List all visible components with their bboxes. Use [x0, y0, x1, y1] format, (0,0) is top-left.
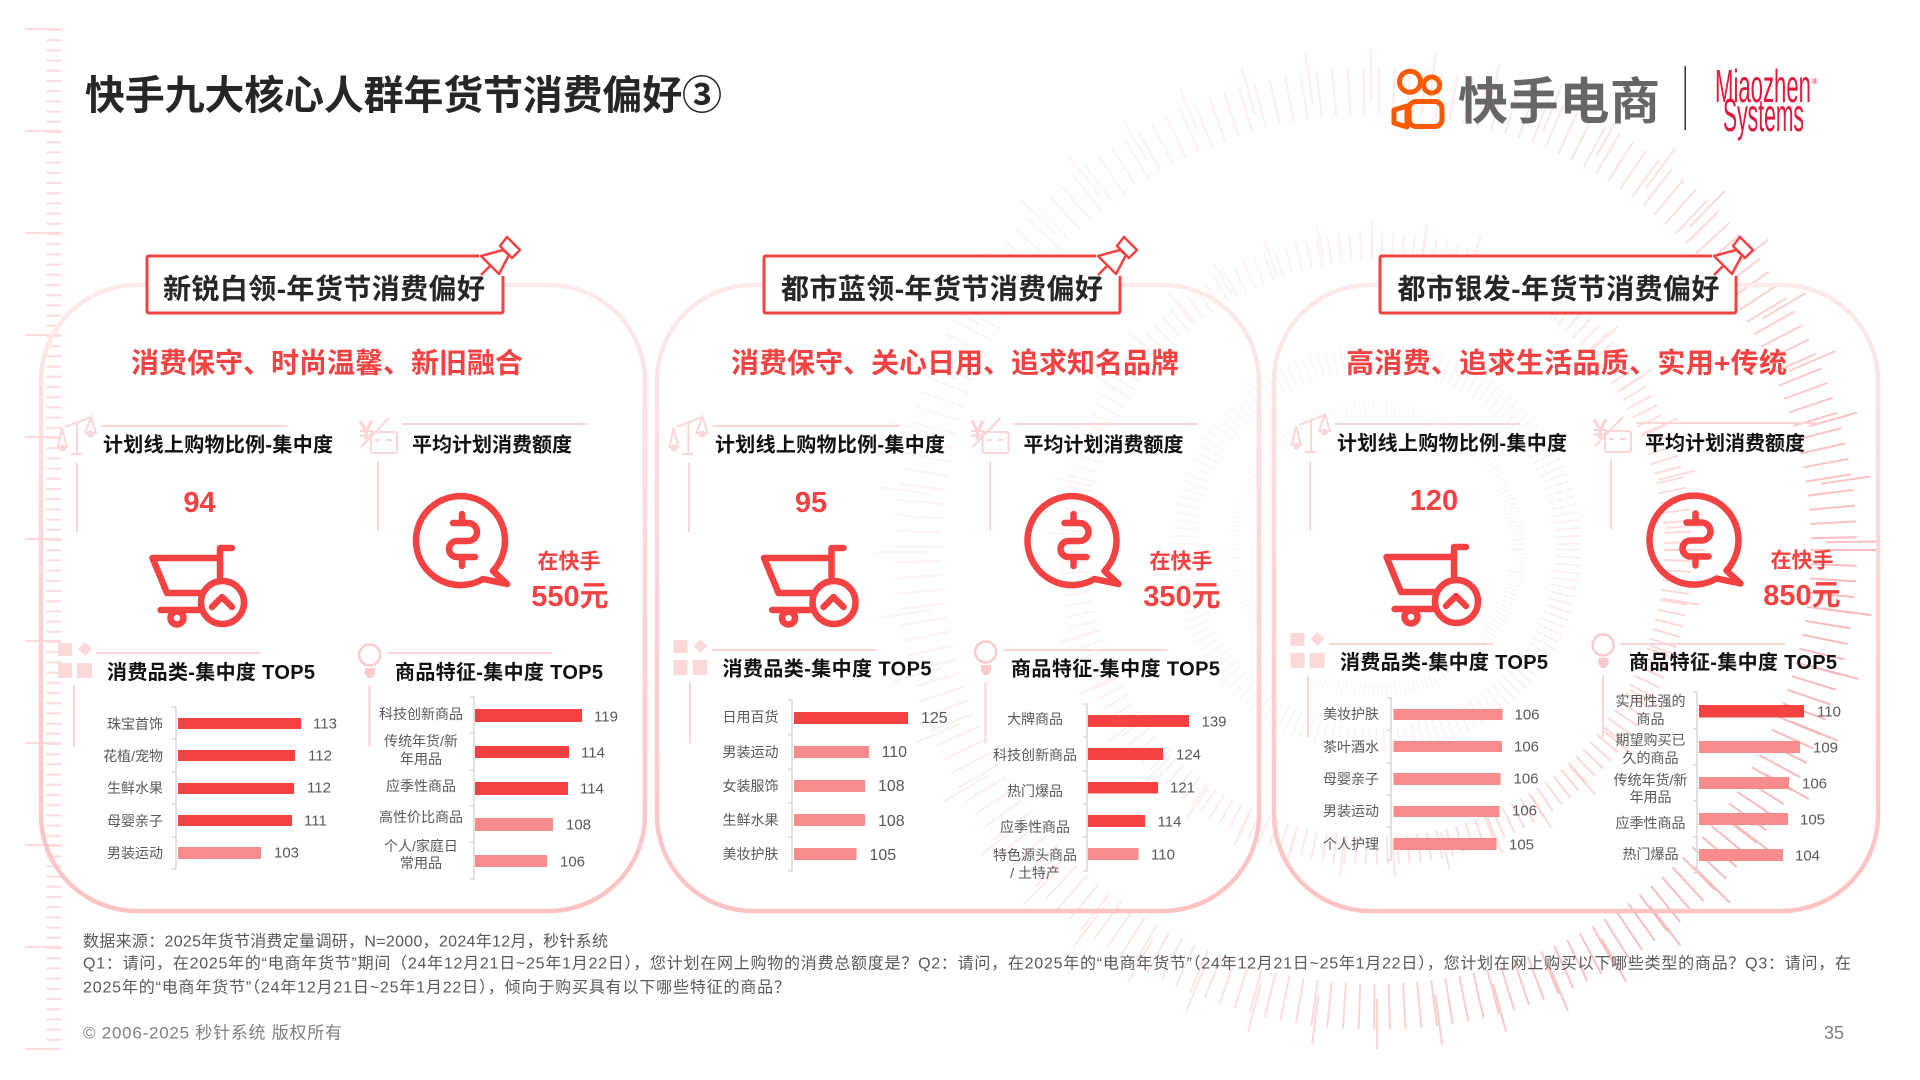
persona summary: 消费保守、关心日用、追求知名品牌 — [731, 348, 1179, 378]
block: feature top5: 商品特征-集中度 TOP5 — [1011, 658, 1220, 680]
block: online share: 94 — [183, 487, 216, 519]
block: feature top5: 106 — [560, 854, 585, 870]
block: category top5: 美妆护肤 — [1323, 706, 1379, 722]
block: feature top5: 119 — [594, 708, 618, 726]
block: feature top5: 114 — [580, 780, 604, 798]
title: 快手九大核心人群年货节消费偏好③ — [85, 74, 722, 118]
block: online share: 95 — [795, 487, 827, 519]
block: feature top5: 商品特征-集中度 TOP5 — [395, 661, 603, 684]
block: feature top5: 高性价比商品 — [379, 809, 463, 825]
footnote: data source — [83, 932, 1851, 996]
footnote: data source: 2025年的“电商年货节”（24年12月21日~25年1月22日），倾向于购买具有以下哪些特征的商品？ — [83, 978, 790, 996]
block: online share — [58, 417, 333, 624]
block: category top5: 112 — [308, 748, 332, 764]
block: average spend: 550元 — [531, 581, 609, 613]
block: category top5: 103 — [274, 844, 299, 862]
block: online share: 计划线上购物比例-集中度 — [103, 434, 333, 456]
header box — [147, 237, 520, 313]
block: feature top5: 114 — [581, 744, 605, 762]
block: category top5: 106 — [1512, 802, 1537, 820]
block: feature top5: 108 — [566, 816, 591, 834]
panel: 新锐白领 — [41, 237, 645, 911]
block: feature top5 — [359, 644, 618, 879]
block: online share: 120 — [1410, 485, 1458, 517]
block: feature top5: 105 — [1800, 812, 1825, 828]
block: feature top5: 年用品 — [400, 751, 442, 767]
block: average spend — [1592, 414, 1841, 612]
block: feature top5: 110 — [1817, 704, 1841, 720]
page number: 35 — [1824, 1023, 1844, 1043]
logo: Miaozhen Systems: Systems — [1723, 89, 1804, 141]
block: category top5: 106 — [1514, 706, 1540, 724]
block: feature top5: 商品特征-集中度 TOP5 — [1629, 651, 1837, 674]
block: feature top5 — [1593, 634, 1841, 873]
card frame — [1274, 285, 1878, 911]
block: category top5: 108 — [878, 813, 905, 830]
block: category top5: 花植/宠物 — [103, 748, 163, 764]
block: feature top5: 个人/家庭日 — [384, 838, 458, 854]
block: category top5: 106 — [1514, 738, 1539, 756]
block: feature top5: 应季性商品 — [1000, 819, 1070, 835]
block: category top5: 女装服饰 — [722, 778, 778, 794]
block: average spend — [358, 414, 609, 613]
block: category top5: 消费品类-集中度 TOP5 — [107, 661, 315, 684]
panel: 都市蓝领 — [657, 237, 1259, 911]
block: average spend: 平均计划消费额度 — [412, 434, 572, 456]
block: feature top5: 商品 — [1636, 711, 1664, 727]
block: category top5: 美妆护肤 — [722, 846, 778, 862]
block: category top5: 消费品类-集中度 TOP5 — [722, 658, 932, 680]
block: feature top5: 应季性商品 — [386, 778, 456, 794]
block: feature top5: 热门爆品 — [1622, 846, 1678, 862]
block: category top5: 男装运动 — [722, 744, 778, 760]
block: average spend: 850元 — [1763, 580, 1841, 612]
block: category top5 — [674, 639, 948, 871]
logo: Miaozhen Systems — [1715, 60, 1818, 141]
block: category top5: 日用百货 — [722, 709, 778, 725]
persona summary: 高消费、追求生活品质、实用+传统 — [1346, 348, 1787, 378]
block: feature top5: 114 — [1158, 814, 1181, 830]
block: average spend: 在快手 — [1150, 550, 1212, 574]
block: feature top5: 热门爆品 — [1007, 783, 1063, 799]
copyright: © 2006-2025 秒针系统 版权所有 — [83, 1024, 342, 1042]
block: feature top5: 期望购买已 — [1616, 732, 1686, 748]
block: online share: 计划线上购物比例-集中度 — [1337, 432, 1567, 455]
block: feature top5: 实用性强的 — [1616, 693, 1686, 709]
block: category top5: 110 — [882, 744, 907, 761]
block: category top5: 母婴亲子 — [1323, 771, 1379, 787]
logo: Miaozhen Systems: ® — [1812, 77, 1818, 86]
block: category top5: 111 — [304, 812, 327, 830]
header box: 都市蓝领-年货节消费偏好 — [781, 274, 1103, 304]
block: feature top5: 应季性商品 — [1616, 815, 1686, 831]
footnote: data source: 数据来源：2025年货节消费定量调研，N=2000，2024年12月，秒针系统 — [83, 932, 608, 950]
block: feature top5: 年用品 — [1630, 789, 1672, 805]
block: feature top5: 特色源头商品 — [993, 847, 1077, 863]
block: feature top5: 常用品 — [400, 855, 442, 871]
block: feature top5: 106 — [1802, 776, 1827, 792]
block: online share: 计划线上购物比例-集中度 — [715, 434, 945, 456]
header box — [1380, 237, 1753, 313]
block: feature top5: 124 — [1176, 746, 1201, 764]
header box: 都市银发-年货节消费偏好 — [1398, 274, 1720, 304]
block: feature top5: 110 — [1151, 846, 1175, 864]
block: feature top5: / 土特产 — [1010, 865, 1060, 881]
block: feature top5: 科技创新商品 — [993, 747, 1077, 763]
block: category top5 — [58, 642, 337, 869]
block: online share — [1292, 415, 1567, 624]
block: category top5: 108 — [878, 778, 905, 795]
logo: Miaozhen Systems: Miaozhen — [1715, 60, 1811, 112]
block: online share — [670, 417, 945, 624]
block: feature top5: 传统年货/新 — [1614, 772, 1687, 788]
persona summary: 消费保守、时尚温馨、新旧融合 — [131, 348, 523, 378]
panel: 都市银发 — [1274, 237, 1878, 911]
header box — [764, 237, 1137, 313]
logo divider — [1684, 66, 1686, 130]
block: feature top5: 139 — [1202, 714, 1227, 730]
block: feature top5: 大牌商品 — [1007, 711, 1063, 727]
card frame — [657, 285, 1259, 911]
background: left ruler ticks — [25, 29, 61, 1050]
block: feature top5: 109 — [1813, 740, 1838, 756]
block: category top5: 珠宝首饰 — [107, 716, 163, 732]
block: average spend: 平均计划消费额度 — [1645, 432, 1805, 455]
block: category top5: 母婴亲子 — [107, 813, 163, 829]
footnote: data source: Q1：请问，在2025年的“电商年货节”期间（24年12月21日~25年1月22日），您计划在网上购物的消费总额度是？Q2：请问，在2025年的“电商年货节”（24年12月21日~25年1月22日），您计划在网上购买以下哪些类型的商品？Q3：请问，在 — [83, 954, 1851, 972]
block: category top5 — [1290, 632, 1548, 860]
background: radial sun rays — [901, 74, 1851, 1024]
block: feature top5: 科技创新商品 — [379, 706, 463, 722]
block: category top5: 125 — [921, 710, 948, 727]
block: category top5: 105 — [870, 847, 896, 864]
block: feature top5: 104 — [1795, 848, 1820, 864]
header box: 新锐白领-年货节消费偏好 — [163, 274, 485, 304]
block: average spend: 平均计划消费额度 — [1024, 434, 1184, 456]
block: category top5: 男装运动 — [1323, 803, 1379, 819]
block: category top5: 消费品类-集中度 TOP5 — [1340, 651, 1548, 674]
block: category top5: 男装运动 — [107, 845, 163, 861]
block: category top5: 生鲜水果 — [722, 812, 778, 828]
logo: Kuaishou e-commerce: 快手电商 — [1458, 74, 1660, 130]
block: category top5: 113 — [313, 716, 337, 732]
block: average spend: 在快手 — [538, 550, 600, 574]
block: category top5: 茶叶酒水 — [1323, 739, 1379, 755]
block: feature top5: 传统年货/新 — [384, 733, 458, 749]
block: average spend: 350元 — [1143, 581, 1221, 613]
block: category top5: 105 — [1509, 836, 1534, 854]
block: feature top5: 121 — [1170, 780, 1195, 796]
block: category top5: 生鲜水果 — [107, 780, 163, 796]
block: average spend — [970, 414, 1221, 613]
block: category top5: 112 — [307, 780, 331, 796]
block: feature top5: 久的商品 — [1622, 750, 1678, 766]
block: category top5: 106 — [1514, 770, 1539, 788]
block: average spend: 在快手 — [1770, 550, 1834, 572]
block: feature top5 — [975, 642, 1227, 881]
block: category top5: 个人护理 — [1323, 836, 1379, 852]
card frame — [41, 285, 645, 911]
